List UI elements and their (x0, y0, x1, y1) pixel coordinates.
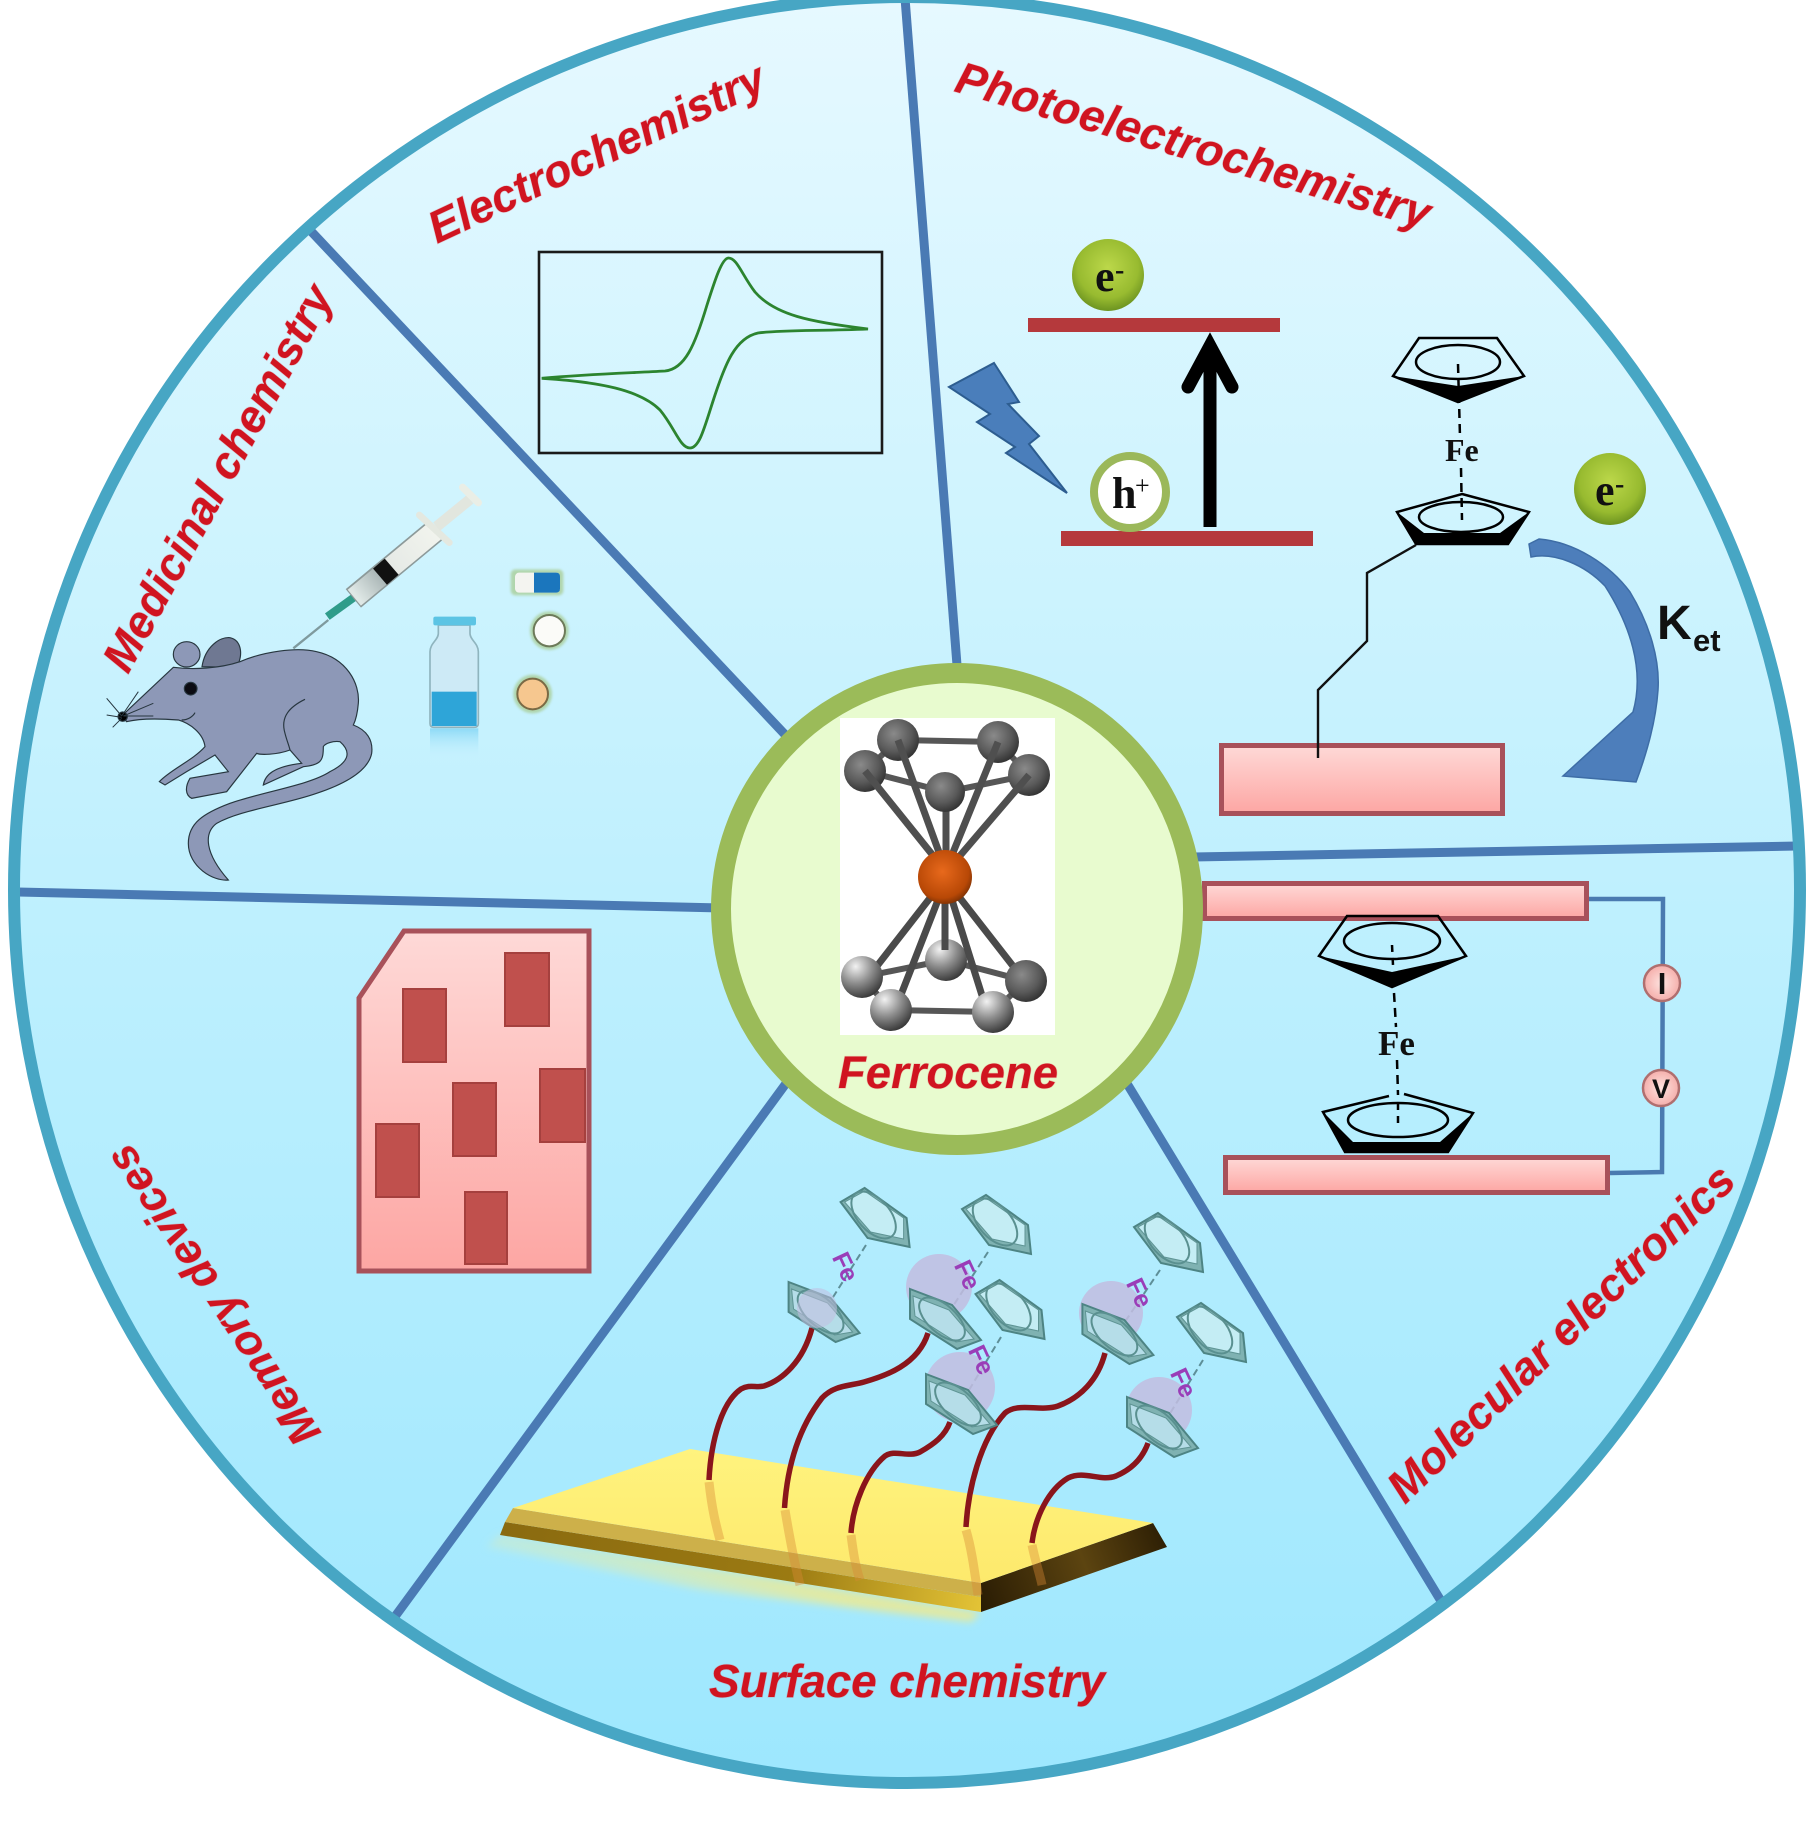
icon: transferred electron: e (1595, 466, 1615, 515)
icon: vial (430, 617, 478, 758)
electrode (1222, 746, 1502, 814)
icon: lightning bolt (949, 363, 1067, 493)
ferrocene structure (1393, 338, 1529, 545)
current meter: I (1658, 966, 1666, 1001)
icon: white tablet (530, 611, 569, 650)
ferrocene structure: Fe (1445, 432, 1479, 468)
icon: memory card (359, 931, 589, 1271)
heading: Electrochemistry: Electrochemistry (420, 51, 775, 253)
alkyl linker wires (709, 1328, 1148, 1543)
gold substrate (486, 1449, 1167, 1622)
ferrocene monolayer: Fe (826, 1248, 864, 1286)
panel: medicinal chemistry (92, 274, 569, 880)
heading: Surface chemistry: Surface chemistry (709, 1655, 1107, 1707)
chart: cyclic voltammogram (539, 252, 882, 453)
heading: Ferrocene: Ferrocene (838, 1047, 1058, 1098)
molecule model (840, 718, 1055, 1035)
icon: transferred electron: - (1615, 469, 1624, 500)
heading: Memory devices: Memory devices (96, 1136, 330, 1455)
ferrocene monolayer: Fe (948, 1256, 986, 1294)
ferrocene monolayer (789, 1183, 1246, 1457)
icon: syringe (293, 487, 478, 648)
arrow: electron transfer (1529, 539, 1658, 782)
icon: electron on conduction band: - (1115, 255, 1124, 286)
icon: mouse (107, 638, 372, 880)
top electrode (1204, 884, 1586, 918)
icon: hole (1094, 456, 1166, 528)
ferrocene junction: Fe (1378, 1024, 1415, 1063)
wire footprints (709, 1482, 1042, 1595)
label: Ket rate constant (1657, 597, 1721, 658)
panel: molecular electronics (1204, 884, 1745, 1512)
current meter (1644, 965, 1680, 1001)
bottom electrode (1226, 1158, 1608, 1192)
heading: Medicinal chemistry: Medicinal chemistry (92, 274, 344, 680)
label: Ket rate constant: K (1657, 597, 1692, 650)
label: Ket rate constant: et (1693, 623, 1721, 658)
circuit wires (1588, 899, 1663, 1173)
icon: hole: + (1135, 471, 1150, 500)
voltage meter: V (1652, 1074, 1670, 1104)
panel: surface chemistry (486, 1183, 1246, 1707)
icon: electron on conduction band (1072, 239, 1144, 311)
icon: orange tablet (513, 675, 552, 713)
alkyl chain linker (1318, 545, 1416, 758)
arrow: excitation (1188, 345, 1232, 527)
icon: electron on conduction band: e (1095, 252, 1115, 301)
hub disc (721, 673, 1193, 1145)
voltage meter (1643, 1070, 1679, 1106)
conduction band (1028, 318, 1280, 332)
ferrocene junction (1319, 916, 1473, 1152)
ferrocene monolayer: Fe (1120, 1274, 1158, 1312)
panel: memory devices (96, 931, 589, 1455)
panel: central ferrocene hub (721, 673, 1193, 1145)
icon: hole: h (1112, 469, 1136, 518)
icon: capsule (511, 569, 563, 595)
panel: photoelectrochemistry (949, 52, 1721, 813)
heading: Photoelectrochemistry: Photoelectrochemistry (950, 52, 1439, 239)
ferrocene monolayer: Fe (962, 1341, 1000, 1379)
ferrocene monolayer: Fe (1164, 1364, 1202, 1402)
valence band (1061, 531, 1313, 546)
panel: electrochemistry (420, 51, 882, 453)
heading: Molecular electronics: Molecular electronics (1377, 1154, 1745, 1512)
icon: transferred electron (1574, 453, 1646, 525)
